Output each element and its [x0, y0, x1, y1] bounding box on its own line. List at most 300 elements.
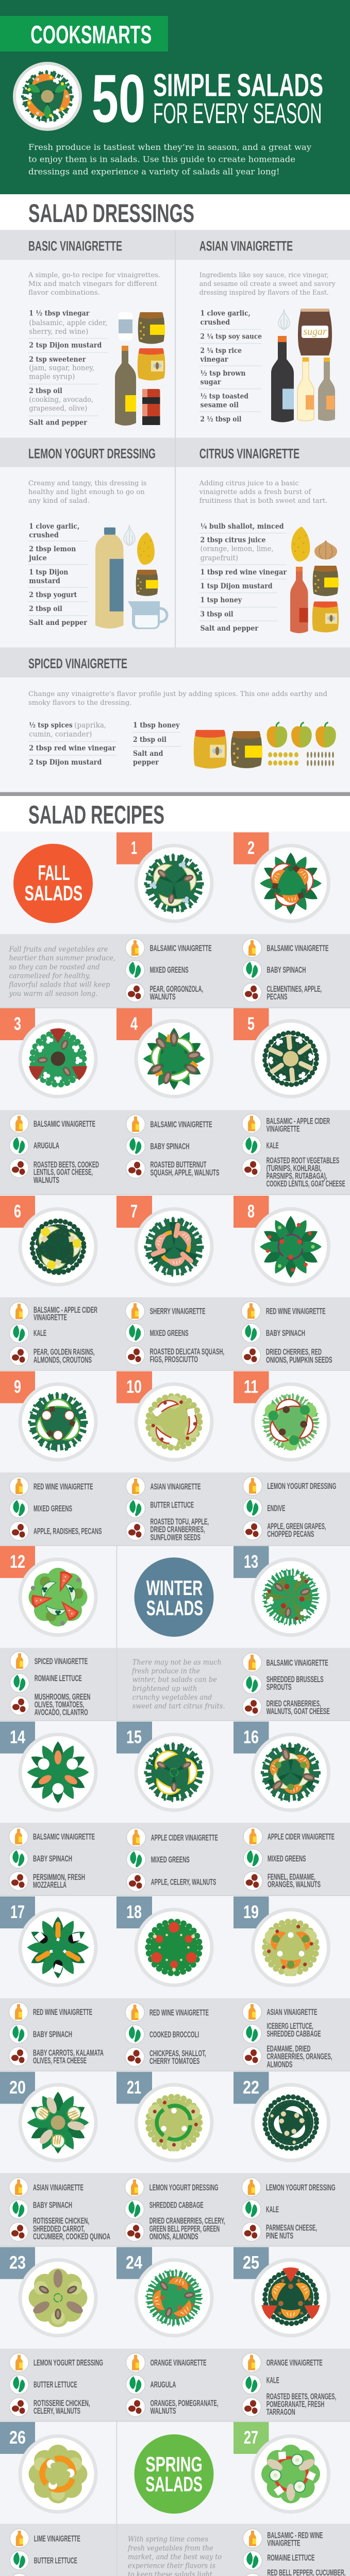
ingredients: ROMAINE LETTUCE	[267, 2553, 314, 2563]
ingredients	[10, 2529, 100, 2576]
ingredients: APPLE, CELERY, WALNUTS	[151, 1878, 216, 1887]
ingredient list: sesame oil	[200, 401, 239, 410]
winter circle: SALADS	[146, 1596, 203, 1620]
number badge	[234, 2247, 269, 2279]
recipe 20	[0, 2072, 110, 2242]
ingredients: ROTISSERIE CHICKEN,	[34, 2399, 90, 2408]
ingredients: KALE	[266, 2205, 279, 2214]
recipe 12	[0, 1546, 97, 1717]
ingredients: BABY SPINACH	[33, 1854, 72, 1863]
ingredients: ROTISSERIE CHICKEN,	[33, 2216, 89, 2226]
number badge: 20	[9, 2077, 26, 2097]
number badge: 23	[9, 2253, 26, 2273]
logo bar: COOKSMARTS	[30, 21, 152, 49]
salad plate	[20, 1558, 97, 1635]
ingredient list	[28, 721, 181, 767]
recipe 27	[234, 2422, 345, 2576]
salad plate	[20, 1021, 96, 1096]
ingredients: CELERY, WALNUTS	[34, 2406, 80, 2416]
ingredients	[242, 2353, 336, 2417]
ingredients: GREEN BELL PEPPER, GREEN	[149, 2224, 220, 2233]
ingredients: ROASTED BEETS, COOKED	[34, 1160, 99, 1170]
ingredients	[9, 2353, 103, 2417]
ingredient bands	[0, 934, 350, 2576]
salad plate	[20, 2436, 96, 2512]
ingredient list: ½ tsp brown	[200, 369, 246, 378]
ingredients: BALSAMIC - APPLE CIDER	[34, 1306, 97, 1315]
number badge	[234, 1546, 269, 1578]
description: Change any vinaigrette's flavor profile just by adding spices. This one adds earthy and	[28, 690, 327, 698]
winter circle: WINTER	[146, 1576, 203, 1600]
spring circle: SALADS	[145, 2472, 203, 2496]
ingredients	[126, 1301, 224, 1365]
heading: ASIAN VINAIGRETTE	[199, 239, 293, 254]
salad plate	[136, 1909, 212, 1986]
ingredients: BABY CARROTS, KALAMATA	[33, 2048, 104, 2058]
illustration: coriander seeds	[268, 752, 298, 766]
salad plate	[20, 1384, 96, 1460]
number badge: 26	[9, 2428, 26, 2448]
ingredient list: 2 tbsp oil	[133, 736, 166, 744]
ingredients	[127, 1828, 218, 1891]
ingredient list: 1 tsp Dijon	[29, 568, 68, 577]
illustration: red wine vinegar bottle	[290, 567, 308, 633]
winter paragraph	[131, 1658, 225, 1710]
heading: LEMON YOGURT DRESSING	[28, 446, 156, 461]
ingredient list: 1 tsp honey	[200, 596, 242, 604]
ingredients: BALSAMIC VINAIGRETTE	[33, 1833, 95, 1842]
illustration: lemon	[291, 527, 310, 562]
ingredients: SQUASH, APPLE, WALNUTS	[151, 1168, 220, 1177]
winter salads intro	[131, 1557, 225, 1710]
ingredients: TARRAGON	[266, 2408, 295, 2417]
illustration: rice vinegar bottle	[297, 358, 314, 421]
ingredients: ASIAN VINAIGRETTE	[151, 1482, 201, 1492]
description: dressing inspired by flavors of the East.	[199, 289, 329, 297]
ingredients	[242, 2002, 332, 2070]
intro paragraph: Fresh produce is tastiest when they’re in season, and a great way	[28, 142, 311, 152]
ingredients	[242, 2178, 336, 2241]
description: Adding citrus juice to a basic	[199, 480, 299, 487]
salad plate	[249, 1205, 332, 1289]
ingredients: ROASTED DELICATA SQUASH,	[150, 1347, 224, 1357]
number badge: 1	[131, 838, 137, 858]
ingredients: CUCUMBER, COOKED QUINOA	[33, 2232, 110, 2242]
ingredients	[242, 1114, 345, 1189]
description	[28, 690, 327, 707]
ingredients: KALE	[34, 1329, 46, 1338]
ingredients: BALSAMIC VINAIGRETTE	[150, 944, 212, 953]
illustration: honey jar	[194, 730, 227, 769]
ingredients	[9, 2178, 110, 2242]
salad plate	[253, 1383, 330, 1460]
ingredients: BALSAMIC VINAIGRETTE	[151, 1120, 212, 1129]
number badge	[0, 1546, 35, 1578]
number badge: 22	[243, 2077, 259, 2097]
ingredient list: sherry, red wine)	[29, 328, 88, 336]
salad plate	[249, 842, 332, 925]
header panel	[0, 0, 350, 194]
number badge	[234, 1196, 269, 1228]
recipe 7	[116, 1196, 224, 1365]
winter paragraph: sweet and tart citrus fruits.	[132, 1702, 225, 1710]
ingredients: SPICED VINAIGRETTE	[35, 1657, 88, 1666]
ingredients: ARUGULA	[151, 2380, 176, 2389]
ingredient list: (orange, lemon, lime,	[200, 545, 273, 553]
ingredients: APPLE CIDER VINAIGRETTE	[151, 1833, 218, 1842]
ingredient list: crushed	[200, 318, 230, 327]
recipe 3	[0, 1008, 99, 1185]
ingredients: WALNUTS	[151, 2406, 176, 2416]
ingredient list	[199, 309, 262, 423]
fall circle	[13, 844, 93, 923]
number badge: 6	[14, 1201, 21, 1222]
ingredients: BUTTER LETTUCE	[151, 1500, 194, 1510]
number badge	[116, 2072, 152, 2104]
description: Creamy and tangy, this dressing is	[28, 480, 146, 487]
ingredients: APPLE, RADISHES, PECANS	[34, 1527, 102, 1536]
number badge	[116, 2247, 152, 2279]
ingredients	[126, 1477, 209, 1543]
ingredients: MIXED GREENS	[34, 1504, 72, 1514]
ingredients: COOKED BROCCOLI	[149, 2030, 199, 2040]
illustration: mustard jar	[136, 570, 158, 596]
ingredients: LEMON YOGURT DRESSING	[149, 2183, 219, 2193]
number badge: 8	[247, 1201, 255, 1222]
spring paragraph: fresh vegetables from the	[127, 2544, 213, 2552]
illustration: mustard jar	[313, 566, 339, 596]
recipe 5	[234, 1008, 345, 1189]
fall paragraph: you warm all season long.	[9, 990, 97, 998]
number badge	[0, 1196, 35, 1228]
ingredient list: 2 tbsp lemon	[29, 545, 76, 553]
ingredients: RED WINE VINAIGRETTE	[34, 1482, 93, 1492]
description: A simple, go-to recipe for vinaigrettes.	[28, 272, 160, 279]
spring salads intro	[127, 2434, 222, 2576]
number badge	[116, 1008, 152, 1040]
number badge: 24	[126, 2253, 142, 2273]
number badge: 15	[126, 1727, 142, 1748]
title number 50: 50	[92, 61, 145, 137]
recipe 21	[116, 2072, 225, 2242]
ingredients: ARUGULA	[34, 1141, 59, 1150]
description: Mix and match vinegars for different	[28, 280, 158, 288]
number badge: 9	[14, 1377, 21, 1397]
salad plate	[17, 1906, 99, 1989]
illustration: oil bottle	[95, 528, 124, 629]
ingredients	[9, 1114, 99, 1185]
section heading: salad recipes	[0, 792, 350, 832]
salad plate	[253, 2260, 329, 2336]
header salad plate	[14, 63, 80, 129]
ingredient list: crushed	[29, 531, 59, 539]
intro paragraph: to enjoy them is in salads. Use this guide to create homemade	[28, 155, 295, 164]
description	[28, 480, 146, 505]
description	[199, 272, 336, 297]
ingredients: DRIED CRANBERRIES,	[151, 1525, 205, 1534]
ingredients: OLIVES, TOMATOES,	[35, 1700, 84, 1709]
illustration: salt shaker	[119, 312, 132, 341]
recipe 18	[116, 1896, 212, 2066]
ingredients	[242, 1653, 330, 1717]
illustration: honey jar	[138, 348, 165, 380]
fall circle: FALL	[38, 861, 70, 885]
recipe 8	[234, 1196, 332, 1365]
ingredient list: cumin, coriander)	[29, 731, 92, 739]
ingredient list: mustard	[29, 577, 60, 585]
ingredient list: 1 clove garlic,	[200, 309, 251, 317]
illustration: sesame oil bottle	[318, 358, 335, 421]
ingredients	[241, 1301, 332, 1365]
ingredient list: juice	[28, 554, 47, 563]
number badge: 12	[10, 1552, 25, 1572]
ingredient list: Salt and pepper	[29, 619, 88, 627]
salad plate	[136, 1734, 212, 1810]
intro paragraph: dressings and experience a variety of salads all year long!	[28, 166, 280, 176]
ingredients	[9, 1477, 102, 1540]
ingredients: AVOCADO, CILANTRO	[35, 1708, 88, 1717]
recipe 22	[234, 2072, 336, 2241]
winter circle	[134, 1557, 213, 1637]
ingredient list	[28, 522, 88, 627]
ingredients: VINAIGRETTE	[34, 1313, 67, 1323]
number badge: 14	[10, 1727, 25, 1748]
illustration: lemon	[137, 532, 155, 565]
ingredient list: 2 tbsp yogurt	[29, 591, 77, 599]
ingredients	[126, 1115, 220, 1178]
ingredient list: pepper	[133, 758, 159, 767]
illustration: sugar bag: sugar	[303, 326, 327, 337]
ingredients: MIXED GREENS	[151, 1855, 190, 1865]
illustration: spice tin	[142, 389, 160, 425]
number badge	[0, 1008, 35, 1040]
number badge	[234, 1008, 269, 1040]
salad plate	[136, 2083, 213, 2161]
ingredients: ROASTED TOFU, APPLE,	[151, 1517, 209, 1527]
panel: citrus vinaigrette	[176, 438, 350, 633]
fall paragraph: so they can be roasted and	[9, 963, 100, 972]
ingredients: RED WINE VINAIGRETTE	[33, 2008, 92, 2017]
ingredients: KALE	[266, 2376, 279, 2385]
number badge: 3	[14, 1014, 21, 1034]
salad plate	[136, 1384, 212, 1460]
ingredients: KALE	[266, 1141, 279, 1150]
panel: spiced vinaigrette	[0, 648, 350, 769]
ingredient list: 2 tbsp citrus juice	[200, 536, 266, 545]
spring circle	[134, 2434, 213, 2514]
number badge: 21	[127, 2077, 141, 2097]
ingredient list: 1 ½ tbsp vinegar	[29, 309, 90, 317]
ingredients: SHREDDED CARROT,	[33, 2224, 85, 2233]
ingredient list: vinegar	[200, 355, 228, 364]
number badge	[0, 1371, 35, 1403]
number badge	[116, 1371, 152, 1403]
ingredients: FIGS, PROSCIUTTO	[150, 1355, 198, 1364]
ingredients: ENDIVE	[267, 1504, 285, 1513]
ingredient list: Salt and pepper	[200, 624, 259, 633]
ingredient list: 1 tbsp red wine vinegar	[200, 568, 287, 577]
ingredients: BUTTER LETTUCE	[34, 2556, 77, 2566]
recipe 19	[234, 1896, 332, 2070]
heading: BASIC VINAIGRETTE	[28, 239, 122, 254]
description	[28, 272, 160, 297]
ingredients: PEAR, GOLDEN RAISINS,	[34, 1348, 95, 1357]
ingredients: SUNFLOWER SEEDS	[151, 1533, 201, 1543]
ingredients: LEMON YOGURT DRESSING	[34, 2359, 103, 2368]
number badge	[234, 2072, 269, 2104]
salad plate	[253, 1559, 329, 1635]
ingredients	[125, 2003, 209, 2066]
recipe 9	[0, 1371, 102, 1540]
number badge	[0, 1722, 35, 1754]
recipe 26	[0, 2422, 100, 2576]
number badge: 18	[126, 1902, 142, 1922]
illustration: garlic	[124, 525, 135, 546]
recipe 14	[0, 1722, 99, 1891]
ingredients: BABY SPINACH	[266, 1329, 305, 1338]
fall paragraph	[9, 945, 115, 998]
number badge	[116, 1722, 152, 1754]
number badge	[234, 833, 269, 865]
ingredient list: 2 tsp Dijon mustard	[29, 342, 102, 350]
ingredient list: ¼ bulb shallot, minced	[200, 522, 284, 531]
band bottom rules	[0, 1008, 350, 2576]
illustration: shallot	[314, 540, 337, 560]
salad plate	[17, 1731, 99, 1814]
ingredient list: (paprika,	[74, 721, 106, 730]
ingredients: ALMONDS	[267, 2060, 293, 2070]
number badge	[0, 2422, 35, 2454]
number badge: 27	[244, 2428, 258, 2448]
ingredient list: 2 ¼ tsp rice	[200, 347, 242, 355]
number badge	[116, 1196, 152, 1228]
ingredients: VINAIGRETTE	[267, 2539, 300, 2548]
ingredients: CHOPPED PECANS	[267, 1530, 314, 1539]
heading: CITRUS VINAIGRETTE	[199, 446, 299, 461]
ingredients	[10, 1652, 90, 1717]
ingredient list: 1 tsp Dijon mustard	[200, 582, 273, 590]
illustration: mustard jar	[138, 312, 165, 344]
description: healthy and light enough to go on	[28, 488, 145, 496]
recipe 10	[116, 1371, 212, 1543]
ingredient list: (jam, sugar, honey,	[29, 364, 94, 372]
fall paragraph: flavorful salads that will keep	[9, 981, 110, 989]
ingredients: WALNUTS	[34, 1176, 59, 1185]
recipe 1	[116, 833, 212, 1002]
ingredients: MIXED GREENS	[150, 1329, 189, 1338]
salad plate	[17, 2081, 99, 2164]
fall salads intro	[9, 844, 115, 998]
ingredient list: (balsamic, apple cider,	[29, 319, 107, 327]
ingredients: ORANGES, POMEGRANATE,	[151, 2399, 219, 2408]
number badge: 16	[243, 1727, 259, 1748]
ingredients: PERSIMMON, FRESH	[33, 1873, 85, 1882]
recipe 11	[234, 1371, 336, 1540]
ingredients: BALSAMIC VINAIGRETTE	[34, 1120, 95, 1129]
illustration: soy sauce bottle	[271, 336, 294, 422]
recipe 24	[116, 2247, 219, 2417]
ingredient list: grapeseed, olive)	[29, 404, 87, 413]
ingredients: RED WINE VINAIGRETTE	[149, 2008, 209, 2018]
ingredients: MOZZARELLA	[33, 1880, 66, 1890]
ingredient list: maple syrup)	[29, 373, 75, 381]
ingredients: ROMAINE LETTUCE	[35, 1674, 82, 1683]
ingredient list	[28, 309, 107, 427]
number badge: 17	[10, 1902, 25, 1922]
spring circle: SPRING	[145, 2452, 203, 2476]
section heading: salad dressings: SALAD DRESSINGS	[28, 199, 194, 228]
intro paragraph	[28, 142, 311, 176]
spring paragraph: experience their flavors is	[128, 2562, 215, 2570]
recipe 23	[0, 2247, 103, 2417]
ingredients: BABY SPINACH	[151, 1142, 190, 1151]
salad plate	[253, 1021, 329, 1096]
number badge: 10	[126, 1377, 142, 1397]
spring paragraph	[127, 2535, 222, 2576]
number badge	[234, 1896, 269, 1928]
number badge: 13	[244, 1552, 258, 1572]
ingredient list: ½ tsp toasted	[200, 393, 249, 401]
ingredients: DRIED CRANBERRIES, CELERY,	[149, 2216, 225, 2226]
description: smoky flavors to the dressing.	[28, 699, 132, 707]
ingredients	[243, 1827, 335, 1891]
ingredients: CHERRY TOMATOES	[149, 2057, 199, 2066]
winter paragraph: There may not be as much	[132, 1658, 222, 1667]
ingredients	[9, 2002, 104, 2066]
description: any kind of salad.	[28, 497, 90, 505]
winter paragraph: crunchy vegetables and	[132, 1693, 212, 1702]
illustration: cumin seeds	[307, 752, 334, 766]
number badge	[0, 2072, 35, 2104]
number badge: 11	[244, 1377, 258, 1397]
ingredients: ALMONDS, CROUTONS	[34, 1355, 92, 1365]
ingredient list: sugar	[200, 378, 221, 386]
heading: SPICED VINAIGRETTE	[28, 656, 127, 671]
number badge: 5	[247, 1014, 255, 1034]
recipe 17	[0, 1896, 104, 2066]
ingredient list: 2 tbsp oil	[29, 387, 62, 395]
ingredient list: 2 tsp Dijon mustard	[29, 758, 102, 767]
section heading: salad dressings	[0, 194, 350, 230]
illustration: garlic	[278, 309, 290, 330]
recipe 15	[116, 1722, 218, 1891]
ingredient list: ½ tsp spices	[29, 721, 73, 730]
column dividers beside season intros	[116, 1546, 118, 2576]
ingredients: ASIAN VINAIGRETTE	[33, 2183, 84, 2193]
ingredient list: 2 ¼ tsp soy sauce	[200, 333, 262, 341]
spring paragraph: market, and the best way to	[128, 2553, 222, 2561]
ingredients: MUSHROOMS, GREEN	[35, 1692, 90, 1702]
number badge: 4	[130, 1014, 138, 1034]
winter paragraph: winter, but salads can be	[132, 1676, 217, 1684]
ingredients: MIXED GREENS	[150, 965, 189, 975]
salad plate	[253, 1734, 329, 1810]
description: vinaigrette adds a fresh burst of	[199, 488, 312, 496]
ingredients	[243, 2529, 345, 2576]
winter paragraph: fresh produce in the	[131, 1667, 200, 1675]
ingredients	[242, 939, 329, 1002]
ingredients: BABY SPINACH	[267, 965, 306, 975]
panel: basic vinaigrette	[0, 230, 175, 427]
panel: asian vinaigrette	[176, 230, 350, 423]
number badge: 25	[243, 2253, 259, 2273]
ingredients: MIXED GREENS	[268, 1854, 306, 1863]
number badge: 19	[243, 1902, 259, 1922]
salad plate	[136, 2260, 212, 2336]
fall paragraph: heartier than summer produce,	[9, 954, 115, 962]
number badge	[234, 1722, 269, 1754]
salad plate	[20, 2260, 96, 2336]
